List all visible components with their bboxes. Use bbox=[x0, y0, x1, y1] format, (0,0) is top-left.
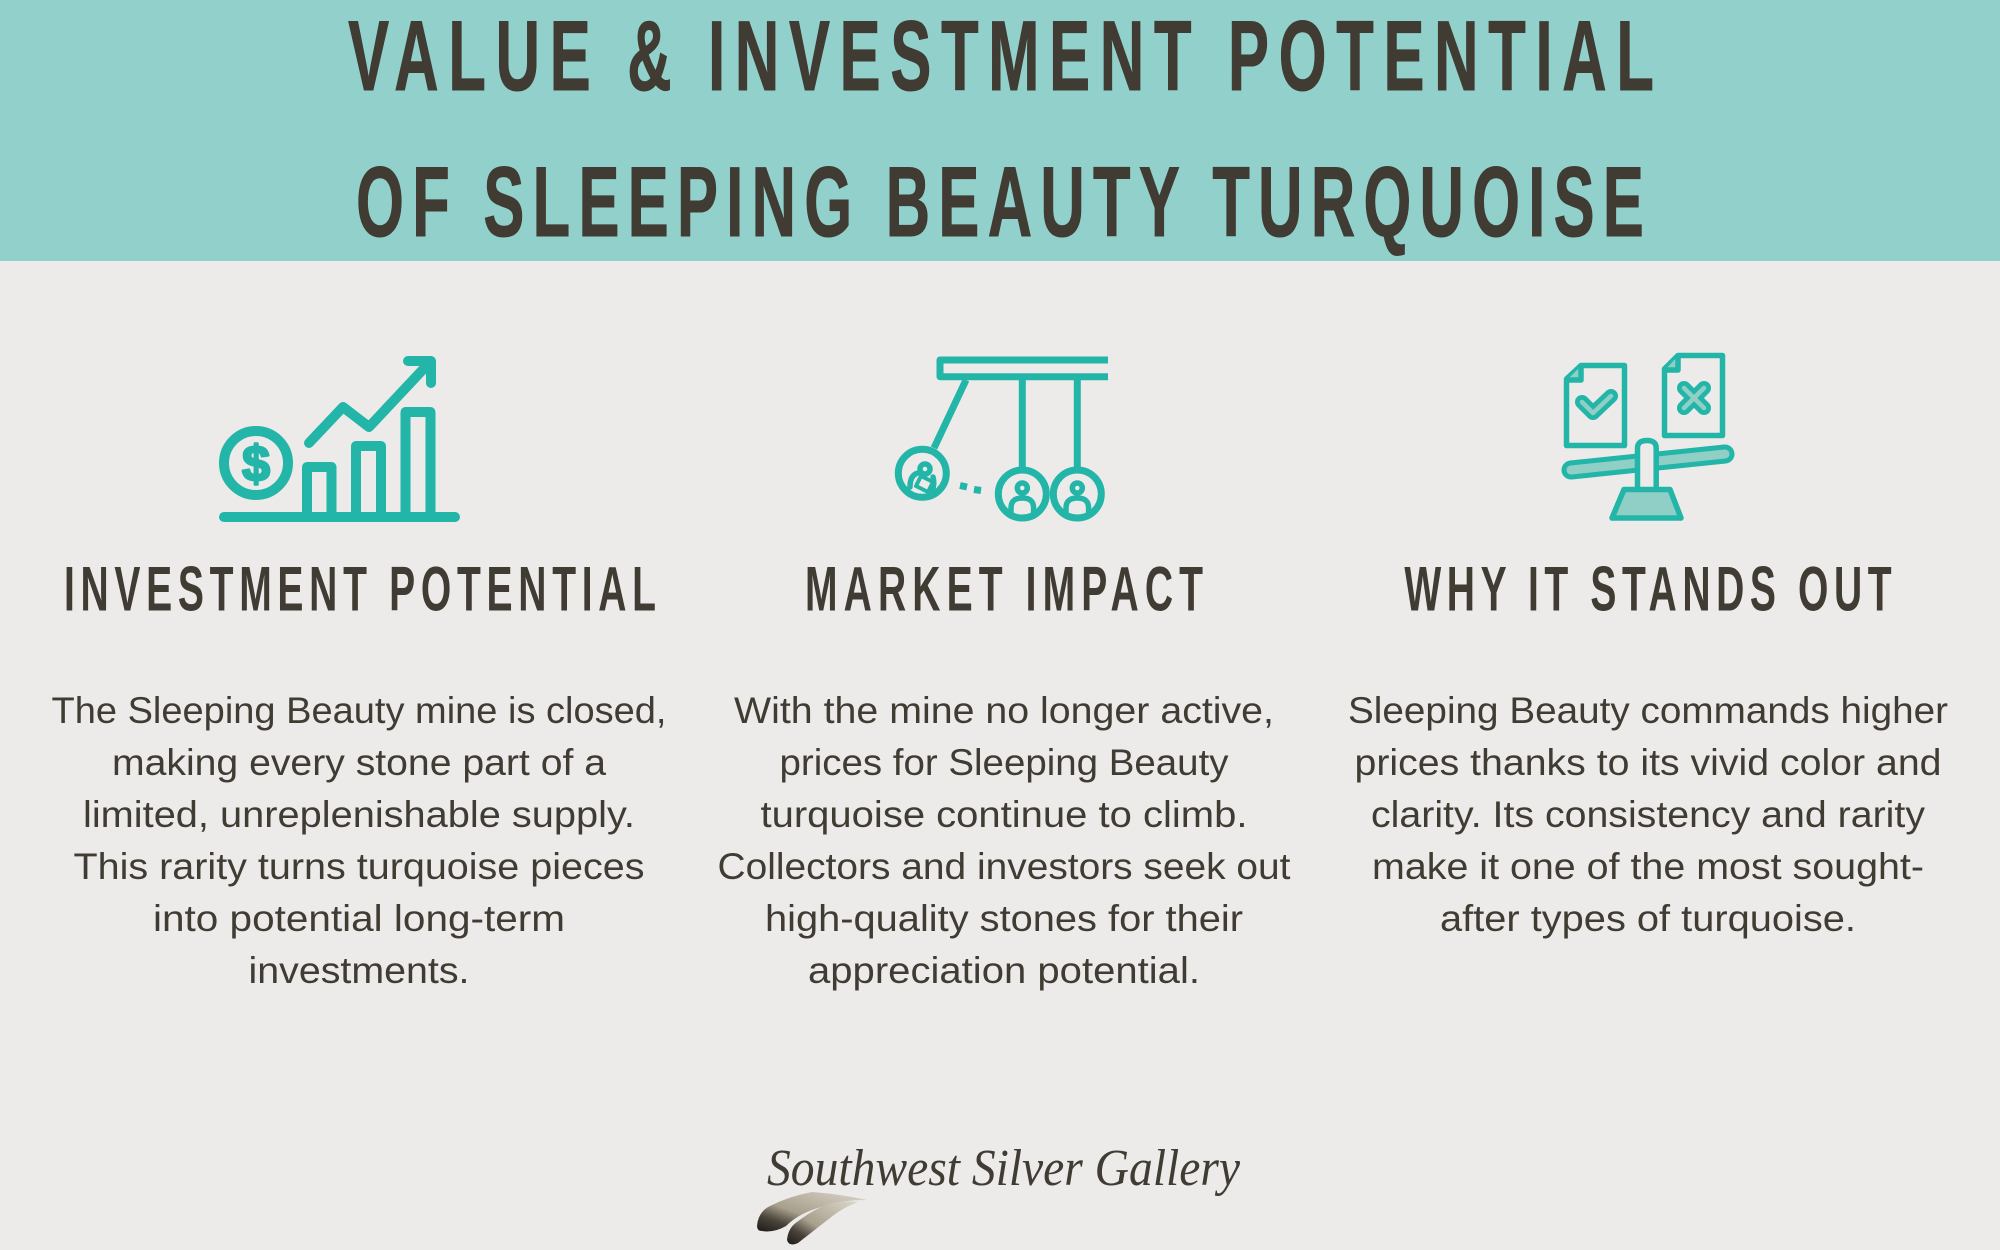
icon: feathers bbox=[757, 1192, 867, 1244]
logo wordmark: Southwest Silver Gallery bbox=[767, 1140, 1241, 1197]
text block: investment potential: This rarity turns turquoise pieces bbox=[74, 846, 644, 887]
title: VALUE & INVESTMENT POTENTIAL bbox=[348, 1, 1654, 112]
text block: market impact: prices for Sleeping Beauty bbox=[780, 742, 1229, 783]
text block: market impact: high-quality stones for their bbox=[765, 898, 1243, 939]
text block: why it stands out: clarity. Its consistency and rarity bbox=[1371, 794, 1926, 835]
text block: why it stands out: make it one of the most sought- bbox=[1372, 846, 1924, 887]
title: OF SLEEPING BEAUTY TURQUOISE bbox=[356, 147, 1644, 258]
text block: why it stands out: prices thanks to its vivid color and bbox=[1354, 742, 1942, 783]
text block: investment potential: investments. bbox=[248, 950, 470, 991]
text block: market impact: turquoise continue to climb. bbox=[760, 794, 1248, 835]
text block: investment potential: into potential long-term bbox=[153, 898, 565, 939]
text block: market impact: With the mine no longer active, bbox=[734, 690, 1274, 731]
heading: market impact: MARKET IMPACT bbox=[805, 555, 1203, 625]
panel: investment potential bbox=[52, 361, 666, 991]
text block: investment potential bbox=[52, 690, 666, 991]
text block: investment potential: The Sleeping Beauty mine is closed, bbox=[52, 690, 666, 731]
text block: investment potential: making every stone part of a bbox=[112, 742, 606, 783]
header band bbox=[0, 0, 2000, 261]
text block: investment potential: limited, unreplenishable supply. bbox=[83, 794, 635, 835]
text block: why it stands out: after types of turquoise. bbox=[1440, 898, 1856, 939]
panel: why it stands out bbox=[1348, 356, 1948, 939]
text block: market impact bbox=[718, 690, 1291, 991]
title bbox=[348, 1, 1654, 258]
panel: market impact bbox=[718, 360, 1291, 991]
icon: balance scale weighing documents bbox=[1566, 356, 1725, 518]
text block: market impact: Collectors and investors seek out bbox=[718, 846, 1291, 887]
text block: why it stands out bbox=[1348, 690, 1948, 939]
icon: rising bar chart with dollar coin bbox=[224, 361, 455, 517]
text block: why it stands out: Sleeping Beauty commands higher bbox=[1348, 690, 1948, 731]
logo: southwest silver gallery bbox=[757, 1140, 1241, 1244]
heading: investment potential: INVESTMENT POTENTIAL bbox=[64, 555, 656, 625]
heading: why it stands out: WHY IT STANDS OUT bbox=[1404, 555, 1892, 625]
icon: rising bar chart with dollar coin: $ bbox=[242, 436, 270, 492]
text block: market impact: appreciation potential. bbox=[808, 950, 1200, 991]
icon: newton's cradle of people bbox=[898, 360, 1108, 518]
